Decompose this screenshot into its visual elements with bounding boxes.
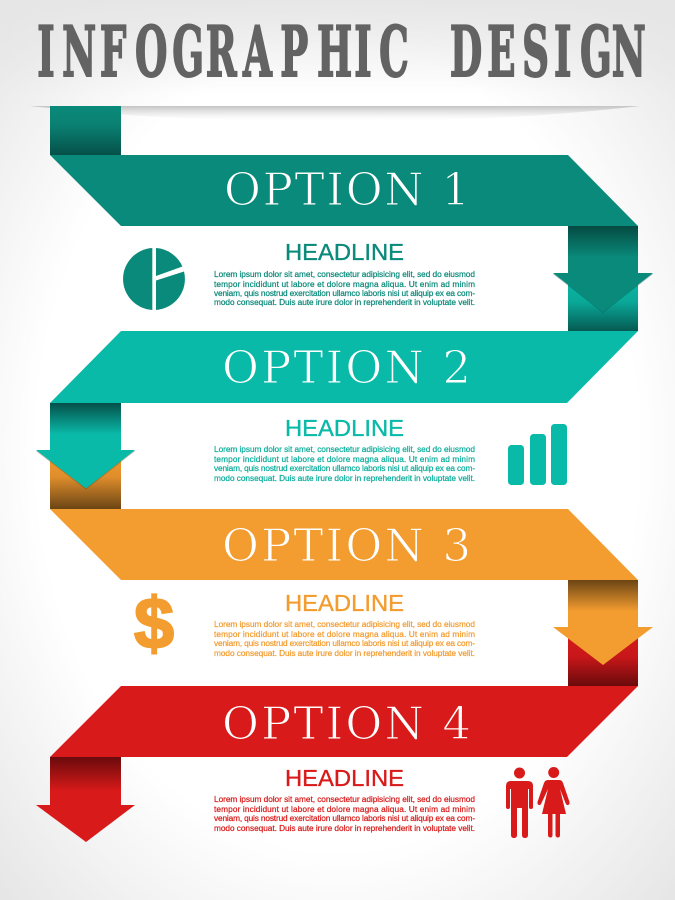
body text: option 1: Lorem ipsum dolor sit amet, consectetur adipisicing elit, sed do eiusmod: [214, 269, 475, 279]
body text: option 4: veniam, quis nostrud exercitation ullamco laboris nisi ut aliquip ex ea com-: [214, 813, 475, 823]
title: INFOGRAPHIC DESIGN: [37, 13, 646, 93]
body text: option 1: modo consequat. Duis aute irure dolor in reprehenderit in voluptate velit.: [214, 297, 475, 307]
panel: option 4: [36, 686, 638, 842]
body text: option 2: Lorem ipsum dolor sit amet, consectetur adipisicing elit, sed do eiusmod: [214, 444, 475, 454]
body text: option 1: [214, 269, 475, 307]
label: option 1: OPTION 1: [224, 163, 470, 216]
arrow: option 3 to option 4: [553, 580, 653, 686]
arrow: option 2 to option 3: [36, 403, 135, 509]
body text: option 4: [214, 794, 475, 833]
label: option 4: OPTION 4: [222, 697, 471, 750]
body text: option 3: veniam, quis nostrud exercitation ullamco laboris nisi ut aliquip ex ea com-: [214, 638, 475, 648]
headline: option 3: HEADLINE: [285, 590, 404, 616]
body text: option 1: veniam, quis nostrud exercitation ullamco laboris nisi ut aliquip ex ea com-: [214, 288, 475, 298]
top ribbon tab: [50, 106, 121, 155]
body text: option 2: tempor incididunt ut labore et dolore magna aliqua. Ut enim ad minim: [214, 454, 475, 464]
panel: option 3: [50, 509, 653, 686]
body text: option 3: Lorem ipsum dolor sit amet, consectetur adipisicing elit, sed do eiusmod: [214, 619, 475, 629]
ribbon: option 4: [50, 686, 638, 757]
body text: option 3: modo consequat. Duis aute irure dolor in reprehenderit in voluptate velit.: [214, 648, 475, 658]
body text: option 1: tempor incididunt ut labore et dolore magna aliqua. Ut enim ad minim: [214, 279, 475, 289]
body text: option 3: tempor incididunt ut labore et dolore magna aliqua. Ut enim ad minim: [214, 629, 475, 639]
icon: dollar sign: $: [134, 584, 174, 664]
panel: option 1: [50, 155, 653, 331]
panel: option 2: [36, 331, 638, 509]
ribbon: option 2: [50, 331, 638, 403]
body text: option 3: [214, 619, 475, 658]
label: option 2: OPTION 2: [222, 341, 471, 394]
arrow: option 4 down: [36, 757, 135, 842]
body text: option 2: [214, 444, 475, 483]
body text: option 4: modo consequat. Duis aute irure dolor in reprehenderit in voluptate velit.: [214, 823, 475, 833]
ribbon: option 3: [50, 509, 638, 580]
body text: option 4: Lorem ipsum dolor sit amet, consectetur adipisicing elit, sed do eiusmod: [214, 794, 475, 804]
arrow: option 1 to option 2: [553, 226, 653, 331]
ribbon: option 1: [50, 155, 638, 226]
label: option 3: OPTION 3: [222, 519, 471, 572]
icon: bar chart: [508, 424, 567, 485]
icon: man and woman: [506, 767, 570, 838]
headline: option 4: HEADLINE: [285, 765, 404, 791]
body text: option 2: modo consequat. Duis aute irure dolor in reprehenderit in voluptate velit.: [214, 473, 475, 483]
headline: option 1: HEADLINE: [285, 239, 404, 265]
headline: option 2: HEADLINE: [285, 415, 404, 441]
body text: option 2: veniam, quis nostrud exercitation ullamco laboris nisi ut aliquip ex ea com-: [214, 463, 475, 473]
icon: pie chart: [123, 248, 185, 310]
body text: option 4: tempor incididunt ut labore et dolore magna aliqua. Ut enim ad minim: [214, 804, 475, 814]
